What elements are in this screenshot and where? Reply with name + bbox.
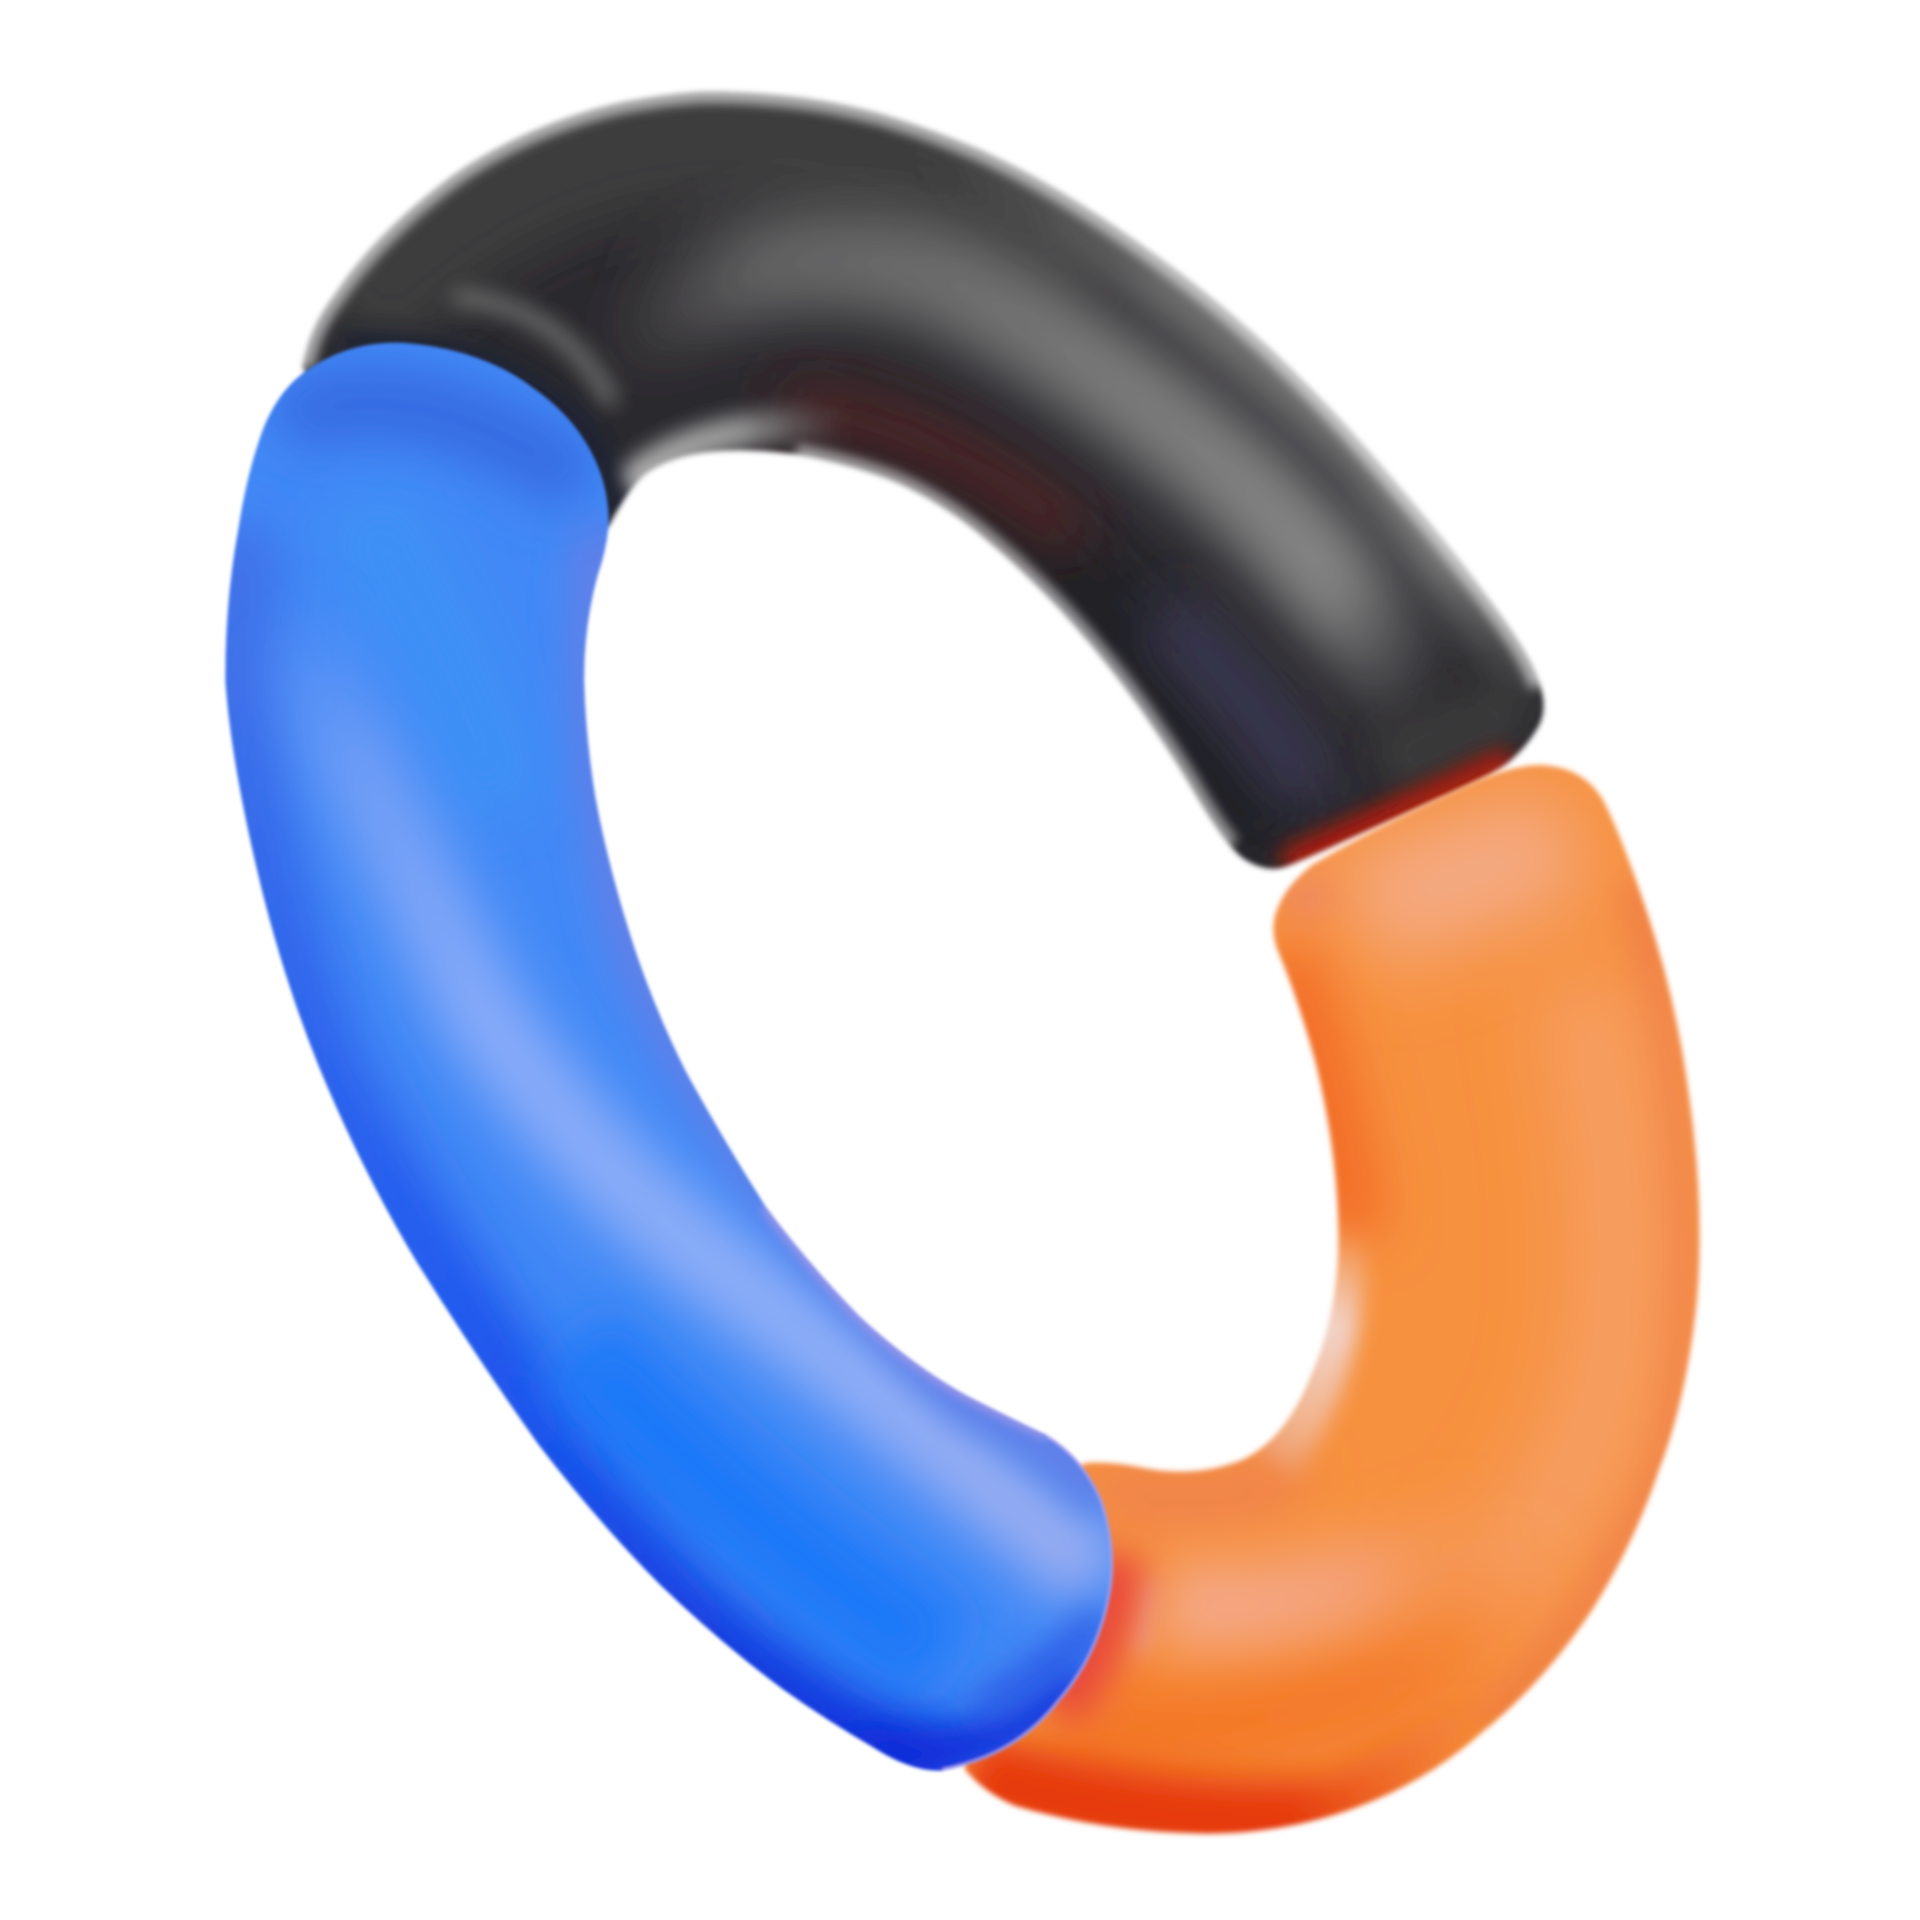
- outer edge shading: [232, 527, 943, 1776]
- inner edge saturated: [1280, 955, 1353, 1237]
- inner white highlight: [1273, 1224, 1341, 1463]
- lower saturated band: [1053, 1555, 1543, 1731]
- crease highlight: [1139, 1580, 1149, 1653]
- contact rim light: [943, 1435, 1113, 1771]
- top cap: [282, 402, 582, 484]
- top ridge highlight: [612, 260, 1445, 716]
- inner edge periwinkle: [593, 527, 1108, 1500]
- soft pale inner edge: [796, 454, 1231, 846]
- light ridge: [282, 612, 1102, 1580]
- bottom cap tone: [980, 1616, 1102, 1708]
- end cap red reflection: [1286, 762, 1512, 866]
- inner rim lilac: [765, 1206, 1047, 1435]
- end cap shading: [1384, 704, 1518, 765]
- shoulder highlight near blue: [453, 296, 612, 404]
- lower highlight: [1163, 1531, 1494, 1607]
- bottom cap deep blue: [857, 1678, 1084, 1754]
- segment: black arc: [299, 88, 1548, 874]
- top tube tone: [1090, 1469, 1298, 1500]
- soft pale outer edge: [302, 92, 1540, 686]
- right outer tone: [1482, 882, 1677, 1733]
- segment: orange arc: [931, 735, 1739, 1861]
- upper saturated band: [355, 502, 502, 808]
- shadow cast by blue: [343, 349, 612, 527]
- top-left corner tone: [1286, 888, 1329, 912]
- bottom edge deep orange: [967, 1714, 1506, 1823]
- upper-right edge glow: [978, 168, 1540, 699]
- blue tint: [1163, 612, 1316, 796]
- inner edge highlight: [624, 422, 845, 490]
- right light band: [1469, 980, 1618, 1604]
- lower saturated band: [576, 1347, 943, 1659]
- outer shell shading: [343, 135, 1102, 318]
- segment: blue arc: [208, 331, 1139, 1788]
- lower dark band: [980, 512, 1340, 862]
- red tint: [784, 404, 1078, 539]
- top highlight: [1359, 845, 1573, 918]
- chart: segmented 3D ring: [222, 88, 1704, 1838]
- red contact shadow: [1053, 1555, 1117, 1708]
